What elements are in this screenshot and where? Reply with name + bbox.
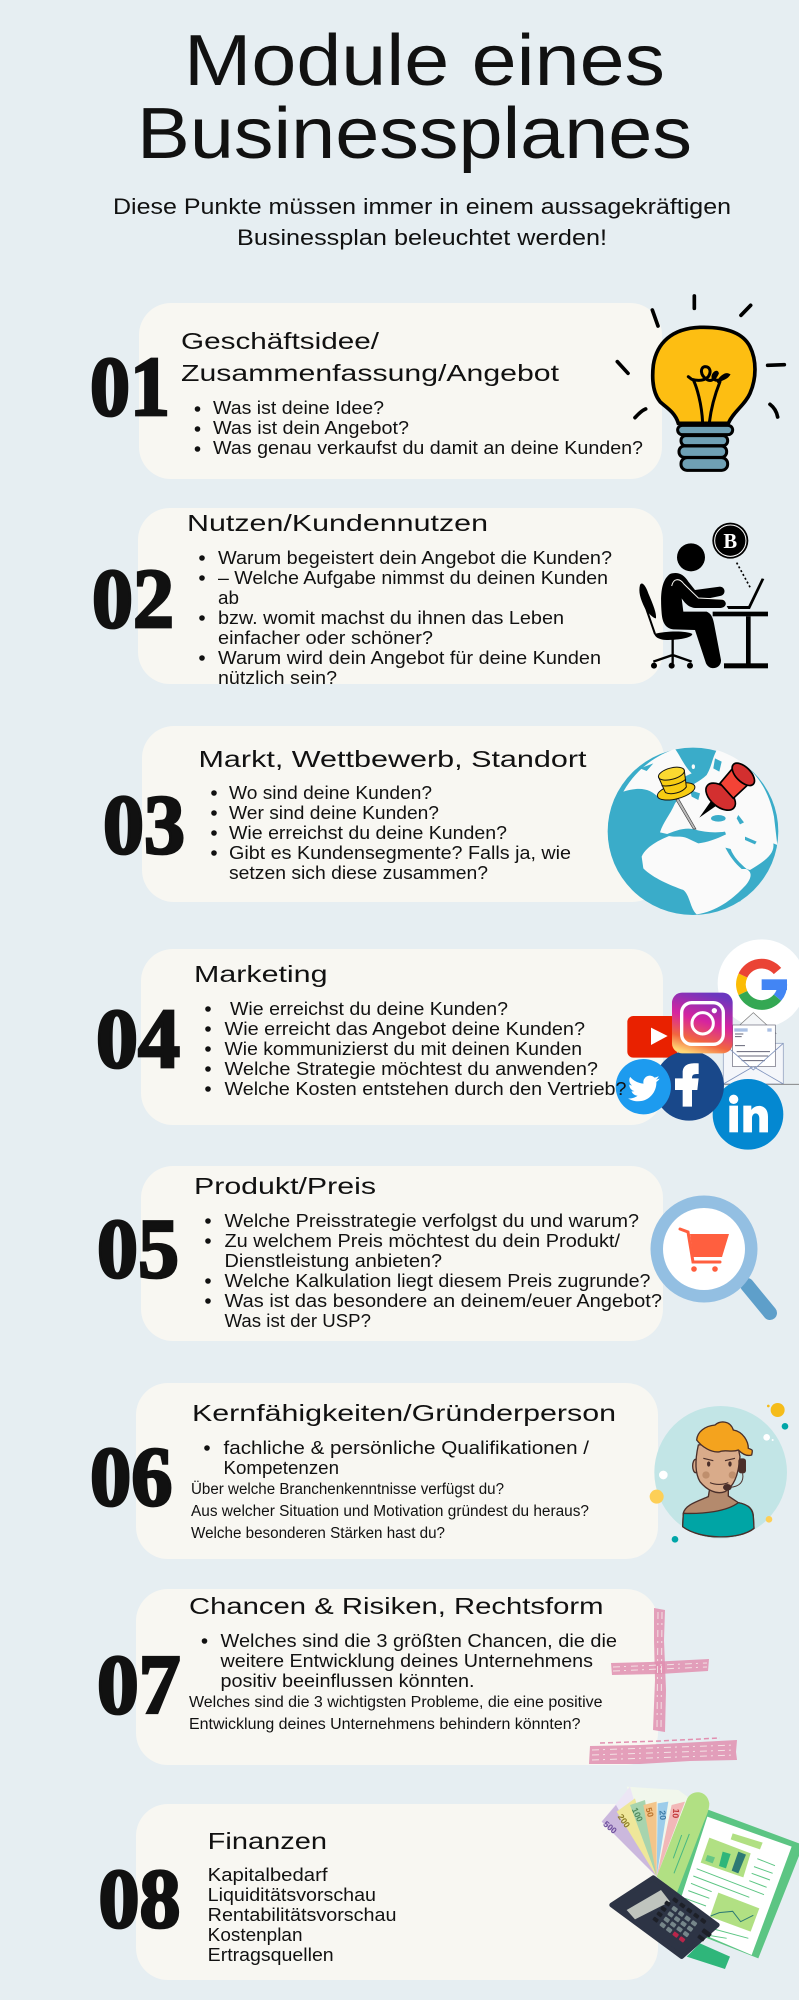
- number 02: 02: [92, 552, 174, 646]
- list 02: Warum begeistert dein Angebot die Kunden?: [218, 548, 612, 568]
- panel: 08 card: [136, 1804, 658, 1980]
- icon: banknotes, report and calculator: [601, 1787, 799, 1969]
- list 07: Entwicklung deines Unternehmens behindern könnten?: [189, 1716, 581, 1733]
- list 08: Kapitalbedarf: [208, 1865, 329, 1885]
- heading 08: Finanzen: [208, 1828, 327, 1854]
- list 01: Was ist dein Angebot?: [213, 418, 409, 438]
- icon: magnifier with shopping cart: [650, 1196, 770, 1313]
- list 08: [208, 1865, 396, 1965]
- list 02: ab: [218, 588, 239, 608]
- list 06: Welche besonderen Stärken hast du?: [191, 1525, 445, 1542]
- heading 02: Nutzen/Kundennutzen: [187, 510, 488, 536]
- icon: globe with pins: [608, 748, 778, 915]
- list 07: positiv beeinflussen könnten.: [220, 1671, 474, 1691]
- list 03: Wo sind deine Kunden?: [229, 783, 432, 803]
- list 02: nützlich sein?: [218, 668, 337, 688]
- list 02: bzw. womit machst du ihnen das Leben: [218, 608, 564, 628]
- list 05: [205, 1211, 662, 1331]
- list 06: Kompetenzen: [224, 1458, 339, 1478]
- list 04: Wie kommunizierst du mit deinen Kunden: [224, 1039, 582, 1059]
- panel: 04 card: [141, 949, 663, 1125]
- list 08: Rentabilitätsvorschau: [208, 1905, 396, 1925]
- icon: banknotes, report and calculator: 100: [630, 1806, 645, 1823]
- list 01: [195, 398, 643, 458]
- icon: banknotes, report and calculator: 10: [670, 1808, 681, 1819]
- panel: 02 card: [138, 508, 663, 684]
- list 02: – Welche Aufgabe nimmst du deinen Kunden: [218, 568, 608, 588]
- icon: social media cluster: [616, 939, 799, 1150]
- list 07: [189, 1631, 617, 1733]
- list 06: [191, 1438, 589, 1542]
- panel: 07 card: [136, 1589, 658, 1765]
- icon: person at desk with bitcoin: B: [723, 531, 737, 553]
- icon: person at desk with bitcoin: [639, 523, 768, 669]
- list 05: Was ist der USP?: [224, 1311, 371, 1331]
- list 04: Wie erreicht das Angebot deine Kunden?: [224, 1019, 585, 1039]
- title: Module eines: [184, 21, 665, 101]
- panel: 01 card: [139, 303, 662, 479]
- icon: banknotes, report and calculator: 500: [601, 1819, 619, 1836]
- heading 04: Marketing: [194, 961, 328, 987]
- number 07: 07: [97, 1638, 180, 1732]
- list 05: Welche Preisstrategie verfolgst du und warum?: [224, 1211, 639, 1231]
- heading 01: [181, 328, 560, 386]
- list 04: Welche Strategie möchtest du anwenden?: [224, 1059, 598, 1079]
- icon: banknotes, report and calculator: 200: [616, 1812, 632, 1830]
- list 06: Aus welcher Situation und Motivation gründest du heraus?: [191, 1503, 589, 1520]
- number 04: 04: [96, 992, 180, 1086]
- list 03: Gibt es Kundensegmente? Falls ja, wie: [229, 843, 571, 863]
- list 05: Welche Kalkulation liegt diesem Preis zugrunde?: [224, 1271, 650, 1291]
- list 07: weitere Entwicklung deines Unternehmens: [219, 1651, 593, 1671]
- title: Businessplanes: [137, 94, 692, 174]
- list 08: Kostenplan: [208, 1925, 302, 1945]
- list 03: Wer sind deine Kunden?: [229, 803, 439, 823]
- list 08: Liquiditätsvorschau: [208, 1885, 376, 1905]
- icon: banknotes, report and calculator: 50: [644, 1806, 656, 1818]
- number 06: 06: [90, 1430, 172, 1524]
- list 04: [205, 999, 626, 1099]
- panel: 06 card: [136, 1383, 658, 1559]
- heading 03: Markt, Wettbewerb, Standort: [198, 746, 587, 772]
- heading 01: Zusammenfassung/Angebot: [181, 360, 560, 386]
- list 06: Über welche Branchenkenntnisse verfügst du?: [191, 1480, 504, 1498]
- list 04: Welche Kosten entstehen durch den Vertrieb?: [224, 1079, 626, 1099]
- icon: banknotes, report and calculator: 20: [657, 1810, 668, 1821]
- panel: 03 card: [142, 726, 664, 902]
- list 03: Wie erreichst du deine Kunden?: [229, 823, 507, 843]
- number 08: 08: [98, 1852, 180, 1946]
- list 07: Welches sind die 3 wichtigsten Probleme, die eine positive: [189, 1694, 602, 1711]
- list 05: Was ist das besondere an deinem/euer Angebot?: [224, 1291, 662, 1311]
- title: [137, 21, 692, 174]
- list 04: Wie erreichst du deine Kunden?: [230, 999, 508, 1019]
- panel: 05 card: [141, 1166, 663, 1341]
- list 05: Zu welchem Preis möchtest du dein Produkt/: [224, 1231, 620, 1251]
- number 05: 05: [97, 1202, 179, 1296]
- heading 07: Chancen & Risiken, Rechtsform: [189, 1593, 604, 1619]
- list 01: Was genau verkaufst du damit an deine Kunden?: [213, 438, 643, 458]
- list 03: setzen sich diese zusammen?: [229, 863, 488, 883]
- list 08: Ertragsquellen: [208, 1945, 334, 1965]
- subtitle: Diese Punkte müssen immer in einem aussagekräftigen: [113, 194, 731, 219]
- icon: pink plus and minus brush strokes: [589, 1608, 737, 1764]
- heading 01: Geschäftsidee/: [181, 328, 380, 354]
- list 02: [199, 548, 612, 688]
- list 05: Dienstleistung anbieten?: [224, 1251, 442, 1271]
- list 03: [211, 783, 571, 883]
- icon: founder avatar: [650, 1403, 788, 1543]
- subtitle: [113, 194, 731, 250]
- list 07: Welches sind die 3 größten Chancen, die die: [220, 1631, 617, 1651]
- number 03: 03: [103, 778, 185, 872]
- icon: light bulb: [617, 296, 784, 470]
- list 06: fachliche & persönliche Qualifikationen /: [224, 1438, 589, 1458]
- subtitle: Businessplan beleuchtet werden!: [237, 225, 607, 250]
- list 01: Was ist deine Idee?: [213, 398, 384, 418]
- list 02: einfacher oder schöner?: [218, 628, 433, 648]
- heading 05: Produkt/Preis: [194, 1173, 376, 1199]
- number 01: 01: [90, 340, 170, 434]
- list 02: Warum wird dein Angebot für deine Kunden: [218, 648, 601, 668]
- heading 06: Kernfähigkeiten/Gründerperson: [192, 1400, 616, 1426]
